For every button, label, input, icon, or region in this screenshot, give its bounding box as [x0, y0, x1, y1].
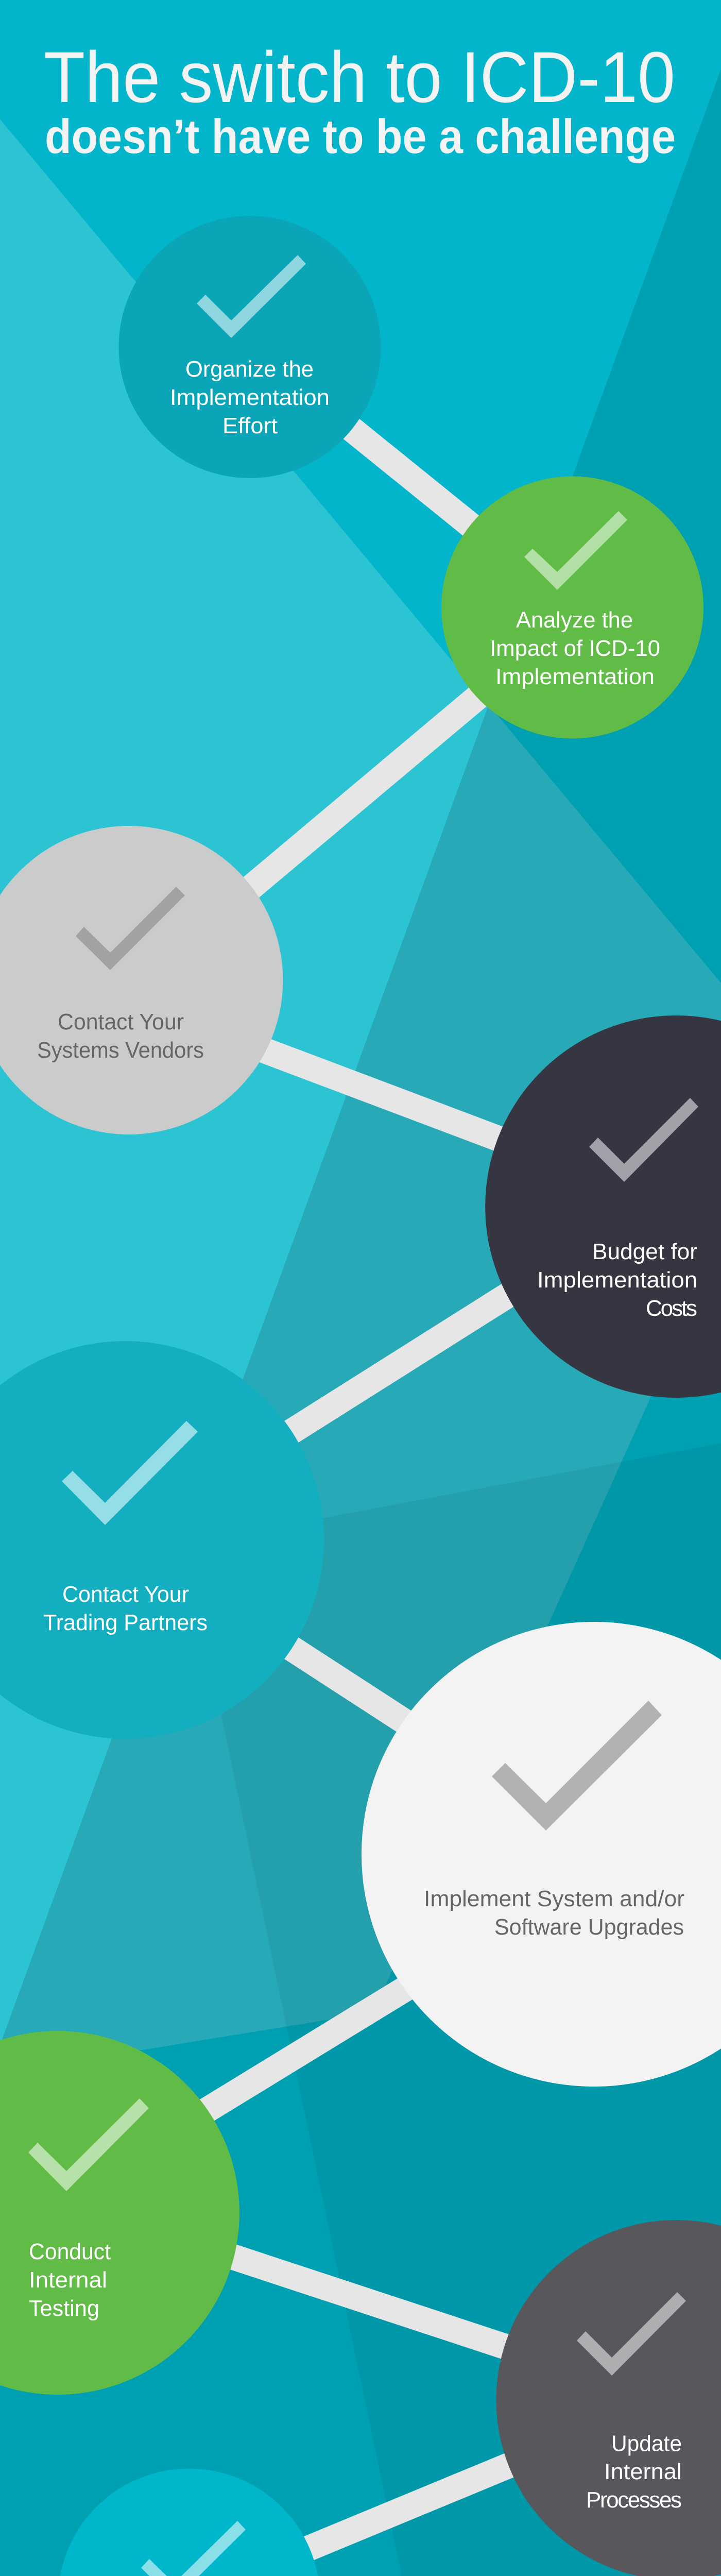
step: Implement System and/or Software Upgrades: [362, 1622, 721, 2087]
step: Contact Your Trading Partners: Trading Partners: [43, 1610, 208, 1635]
step: Organize the Implementation Effort: [118, 216, 381, 478]
step: Organize the Implementation Effort: Organize the: [185, 357, 314, 382]
step: Analyze the Impact of ICD-10 Implementation: Analyze the: [516, 607, 633, 633]
title: The switch to ICD-10: [44, 37, 675, 117]
step: Analyze the Impact of ICD-10 Implementation: Impact of ICD-10: [490, 636, 660, 661]
step: Update Internal Processes: Processes: [586, 2487, 682, 2513]
step: Conduct Internal Testing: Conduct: [29, 2239, 111, 2264]
step: Implement System and/or Software Upgrades: Software Upgrades: [494, 1914, 684, 1940]
step: Update Internal Processes: Internal: [604, 2459, 682, 2484]
step: Conduct Internal Testing: [0, 2031, 239, 2395]
step: Budget for Implementation Costs: Costs: [646, 1296, 697, 1321]
step: Contact Your Trading Partners: [0, 1341, 324, 1739]
step: Contact Your Systems Vendors: [0, 826, 283, 1134]
step: Contact Your Systems Vendors: Systems Vendors: [37, 1038, 204, 1063]
step: Implement System and/or Software Upgrades: Implement System and/or: [424, 1886, 684, 1911]
step: Update Internal Processes: Update: [611, 2431, 682, 2456]
step: Budget for Implementation Costs: Budget for: [592, 1239, 697, 1264]
step: Conduct Internal Testing: Testing: [29, 2296, 99, 2321]
step: Conduct Internal Testing: Internal: [29, 2267, 107, 2293]
title: [44, 37, 676, 163]
step: Update Internal Processes: [496, 2220, 721, 2576]
step: Analyze the Impact of ICD-10 Implementation: Implementation: [495, 664, 655, 689]
step: Organize the Implementation Effort: Implementation: [170, 385, 330, 410]
step: Contact Your Systems Vendors: Contact Your: [58, 1009, 184, 1035]
connector lines between steps: [154, 347, 572, 2576]
step: Conduct Staff Training: [58, 2469, 320, 2576]
step: Contact Your Trading Partners: Contact Your: [62, 1582, 189, 1607]
step: Analyze the Impact of ICD-10 Implementation: [441, 476, 703, 739]
step: Budget for Implementation Costs: [485, 1015, 721, 1398]
step: Organize the Implementation Effort: Effort: [222, 413, 278, 438]
step: Budget for Implementation Costs: Implementation: [537, 1267, 697, 1293]
